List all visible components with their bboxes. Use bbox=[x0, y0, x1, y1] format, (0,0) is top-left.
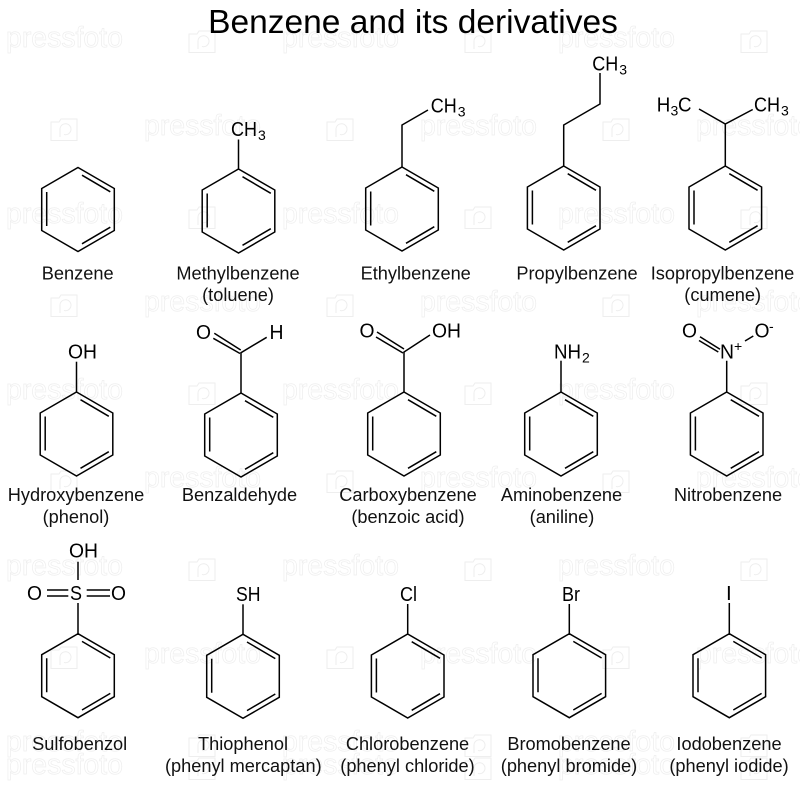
carboxyl bonds bbox=[376, 332, 430, 392]
watermark pattern: pressfoto bbox=[6, 22, 123, 54]
watermark pattern: pressfoto bbox=[420, 110, 537, 142]
ethyl bonds bbox=[402, 110, 428, 167]
name: Benzaldehyde bbox=[182, 485, 297, 505]
name: Bromobenzene bbox=[507, 734, 631, 754]
formula SH: SH bbox=[236, 583, 260, 606]
atom O: O bbox=[196, 321, 211, 344]
ring bbox=[689, 166, 762, 250]
name: Iodobenzene bbox=[676, 734, 782, 754]
propyl bonds bbox=[564, 73, 600, 166]
ring bbox=[205, 393, 277, 477]
watermark pattern: pressfoto bbox=[558, 726, 675, 758]
molecule: propylbenzene bbox=[516, 53, 638, 283]
common name: (phenyl chloride) bbox=[340, 756, 475, 776]
watermark pattern: pressfoto bbox=[6, 726, 123, 758]
ring bbox=[366, 167, 438, 251]
atom N with charge: N bbox=[720, 341, 734, 364]
atom S: S bbox=[70, 582, 82, 605]
formula OH: OH bbox=[69, 540, 98, 563]
watermark pattern: pressfoto bbox=[558, 22, 675, 54]
watermark pattern: pressfoto bbox=[282, 198, 399, 230]
molecule: benzene bbox=[42, 168, 114, 283]
bond bbox=[407, 604, 409, 634]
atom N with charge: + bbox=[734, 338, 742, 354]
formula CH3: CH bbox=[231, 118, 257, 141]
ring bbox=[690, 392, 763, 476]
name: Nitrobenzene bbox=[674, 485, 782, 505]
formula H3C: C bbox=[678, 94, 692, 117]
common name: (phenyl mercaptan) bbox=[165, 756, 322, 776]
name: Benzene bbox=[42, 263, 114, 283]
common name: (cumene) bbox=[684, 285, 761, 305]
watermark pattern: pressfoto bbox=[558, 749, 675, 781]
watermark pattern: pressfoto bbox=[558, 198, 675, 230]
molecule: iodobenzene bbox=[669, 582, 789, 776]
common name: (phenyl iodide) bbox=[669, 756, 789, 776]
watermark pattern: pressfoto bbox=[144, 462, 261, 494]
atom O: O bbox=[682, 320, 697, 343]
sulfo bonds bbox=[47, 562, 110, 634]
watermark pattern: pressfoto bbox=[420, 462, 537, 494]
molecule: carboxybenzene bbox=[339, 320, 477, 527]
molecule: benzaldehyde bbox=[182, 321, 297, 505]
ring bbox=[40, 392, 113, 476]
benzene ring bbox=[42, 168, 114, 252]
atom O left: O bbox=[27, 582, 42, 605]
formula H3C: 3 bbox=[670, 103, 678, 119]
atom O minus: O bbox=[754, 320, 770, 343]
bond bbox=[568, 604, 570, 634]
formula CH3: 3 bbox=[458, 104, 466, 120]
formula H3C: H bbox=[657, 94, 670, 117]
atom Cl: Cl bbox=[400, 583, 417, 606]
watermark pattern: pressfoto bbox=[6, 749, 123, 781]
common name: (phenol) bbox=[43, 507, 109, 527]
watermark pattern: pressfoto bbox=[6, 374, 123, 406]
atom H: H bbox=[270, 321, 284, 344]
formula CH3: 3 bbox=[781, 103, 789, 119]
common name: (aniline) bbox=[530, 507, 594, 527]
isopropyl bonds bbox=[699, 109, 753, 166]
name: Hydroxybenzene bbox=[8, 485, 144, 505]
aldehyde bonds bbox=[213, 333, 267, 393]
molecule: bromobenzene bbox=[501, 583, 637, 776]
watermark pattern: pressfoto bbox=[6, 550, 123, 582]
title: Benzene and its derivatives bbox=[208, 4, 618, 41]
watermark pattern: pressfoto bbox=[144, 110, 261, 142]
molecule: chlorobenzene bbox=[340, 583, 475, 776]
watermark pattern: pressfoto bbox=[282, 726, 399, 758]
name: Ethylbenzene bbox=[361, 263, 471, 283]
common name: (toluene) bbox=[202, 285, 274, 305]
watermark pattern: pressfoto bbox=[282, 22, 399, 54]
formula H3C bbox=[657, 94, 692, 119]
methyl bond bbox=[238, 140, 240, 169]
watermark pattern: pressfoto bbox=[420, 638, 537, 670]
watermark pattern: pressfoto bbox=[6, 198, 123, 230]
molecule: thiophenol bbox=[165, 583, 322, 776]
watermark pattern: pressfoto bbox=[144, 638, 261, 670]
ring bbox=[525, 392, 597, 476]
ring bbox=[42, 634, 114, 718]
molecule: methylbenzene bbox=[176, 118, 300, 305]
ring bbox=[202, 169, 275, 253]
watermark pattern: pressfoto bbox=[144, 286, 261, 318]
watermark pattern: pressfoto bbox=[558, 550, 675, 582]
molecule: ethylbenzene bbox=[361, 95, 471, 283]
common name: (phenyl bromide) bbox=[501, 756, 637, 776]
name: Sulfobenzol bbox=[32, 734, 127, 754]
atom O right: O bbox=[111, 582, 126, 605]
nitro bonds bbox=[699, 336, 753, 392]
watermark pattern: pressfoto bbox=[558, 374, 675, 406]
atom Br: Br bbox=[562, 583, 580, 606]
name: Aminobenzene bbox=[501, 485, 622, 505]
name: Chlorobenzene bbox=[346, 734, 469, 754]
formula OH: OH bbox=[68, 341, 97, 364]
watermark pattern: pressfoto bbox=[282, 749, 399, 781]
watermark pattern: pressfoto bbox=[420, 286, 537, 318]
watermark pattern: pressfoto bbox=[282, 550, 399, 582]
name: Propylbenzene bbox=[516, 263, 638, 283]
molecule: hydroxybenzene bbox=[8, 341, 144, 527]
formula NH2: NH bbox=[554, 341, 581, 364]
name: Thiophenol bbox=[198, 734, 288, 754]
molecule: aminobenzene bbox=[501, 341, 622, 527]
molecule: nitrobenzene bbox=[674, 318, 782, 505]
atom N with charge bbox=[720, 338, 742, 364]
bond bbox=[560, 361, 562, 392]
name: Carboxybenzene bbox=[339, 485, 477, 505]
atom O minus: - bbox=[769, 318, 774, 334]
formula CH3: 3 bbox=[258, 127, 266, 143]
formula CH3: CH bbox=[431, 95, 457, 118]
ring bbox=[371, 634, 444, 718]
ring bbox=[527, 166, 600, 250]
common name: (benzoic acid) bbox=[351, 507, 465, 527]
formula CH3: CH bbox=[754, 94, 780, 117]
formula NH2: 2 bbox=[582, 350, 590, 366]
bond bbox=[728, 603, 730, 634]
bond bbox=[242, 604, 244, 634]
ring bbox=[693, 634, 766, 718]
ring bbox=[533, 634, 606, 718]
watermark pattern: pressfoto bbox=[282, 374, 399, 406]
ring bbox=[207, 634, 279, 718]
ring bbox=[368, 392, 440, 476]
molecule: sulfobenzol bbox=[27, 540, 127, 754]
name: Methylbenzene bbox=[176, 263, 300, 283]
formula CH3: CH bbox=[592, 53, 618, 76]
formula CH3: 3 bbox=[619, 62, 627, 78]
atom O: O bbox=[360, 320, 374, 342]
formula OH: OH bbox=[432, 320, 461, 343]
molecule: isopropylbenzene bbox=[651, 94, 794, 305]
atom I: I bbox=[726, 582, 732, 605]
bond bbox=[76, 362, 78, 392]
name: Isopropylbenzene bbox=[651, 263, 794, 283]
